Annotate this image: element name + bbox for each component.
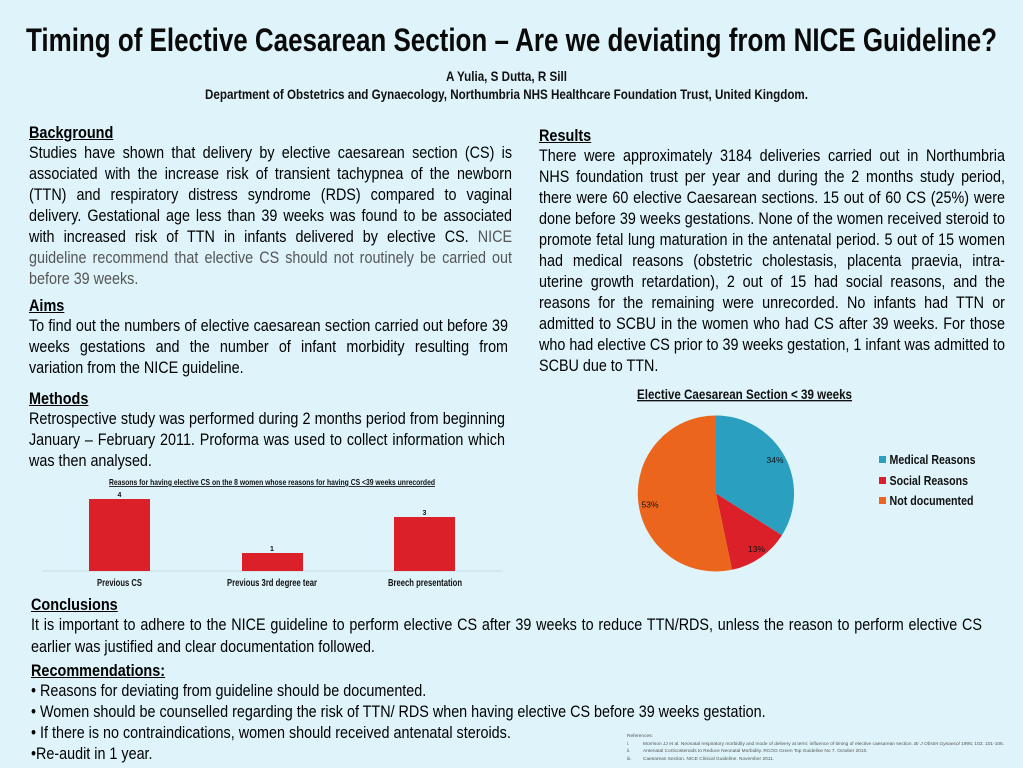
panel: results: There were approximately 3184 deliveries carried out in Northumbria <box>539 147 1005 165</box>
authors and affiliation <box>205 68 808 102</box>
pie chart: elective caesarean section under 39 weeks: 53% <box>641 500 659 510</box>
panel: background: Background <box>29 123 113 142</box>
panel: recommendations: • Women should be counselled regarding the risk of TTN/ RDS when having elective CS before 39 weeks gestation. <box>31 703 766 721</box>
bar chart: reasons unrecorded: Previous 3rd degree tear <box>227 578 317 589</box>
pie chart: elective caesarean section under 39 weeks: 13% <box>748 544 765 554</box>
authors and affiliation: A Yulia, S Dutta, R Sill <box>446 68 567 84</box>
references: References: <box>627 734 653 739</box>
references: Caesarean Section. NICE Clinical Guideline. November 2011. <box>643 756 774 762</box>
panel: results: reasons for the remaining were unrecorded. No infants had TTN or <box>539 294 1005 312</box>
references: Antenatal Corticosteroids to Reduce Neonatal Morbidity. RCOG Green Top Guideline No 7. October 2010. <box>643 749 868 754</box>
panel: results: who had elective CS prior to 39 weeks gestation, 1 infant was admitted to <box>539 336 1005 354</box>
bar chart: reasons unrecorded: 1 <box>270 546 274 553</box>
bar chart: reasons unrecorded <box>42 477 503 589</box>
panel: recommendations <box>31 661 766 763</box>
panel: conclusions: Conclusions <box>31 595 118 614</box>
panel: methods: was then analysed. <box>29 452 152 470</box>
bar chart: reasons unrecorded: Breech presentation <box>388 578 462 589</box>
panel: conclusions: It is important to adhere to the NICE guideline to perform elective CS after 39 weeks to reduce TTN/RDS, unless the reason to perform elective CS <box>31 616 982 634</box>
panel: results: there were 60 elective Caesarean sections. 15 out of 60 CS (25%) were <box>539 189 1005 207</box>
panel: methods: Retrospective study was performed during 2 months period from beginning <box>29 410 505 428</box>
panel: results: done before 39 weeks gestations. None of the women received steroid to <box>539 210 1005 228</box>
references <box>627 734 1004 762</box>
panel: background: Studies have shown that delivery by elective caesarean section (CS) is <box>29 144 512 162</box>
panel: results <box>539 126 1005 375</box>
references: Morrison JJ et al. Neonatal respiratory morbidity and mode of delivery at term: influence of timing of elective caesarean section. Br J Obstet Gynaecol 1995; 102: 101-106. <box>643 742 1004 746</box>
panel: results: NHS foundation trust per year and during the 2 months study period, <box>539 168 1005 186</box>
panel: results: promote fetal lung maturation in the antenatal period. 5 out of 15 women <box>539 231 1005 249</box>
panel: conclusions <box>31 595 982 656</box>
references: i. <box>627 742 629 746</box>
panel: results: uterine growth retardation), 2 out of 15 had social reasons, and the <box>539 273 1005 291</box>
panel: recommendations: • If there is no contraindications, women should received antenatal steroids. <box>31 724 511 742</box>
panel: background <box>29 123 512 288</box>
panel: background: guideline recommend that elective CS should not routinely be carried out <box>29 249 512 267</box>
panel: background: with increased risk of TTN in infants delivered by elective CS. NICE <box>29 228 512 246</box>
panel: recommendations: Recommendations: <box>31 661 165 680</box>
panel: results: admitted to SCBU in the women who had CS after 39 weeks. For those <box>539 315 1005 333</box>
panel: results: had medical reasons (obstetric cholestasis, placenta praevia, intra- <box>539 252 1005 270</box>
panel: methods: January – February 2011. Proforma was used to collect information which <box>29 431 505 449</box>
pie chart: elective caesarean section under 39 weeks: Social Reasons <box>890 474 968 488</box>
panel: background: before 39 weeks. <box>29 270 138 288</box>
panel: aims <box>29 296 508 377</box>
bar chart: reasons unrecorded: 4 <box>118 492 122 499</box>
panel: aims: To find out the numbers of elective caesarean section carried out before 39 <box>29 317 508 335</box>
panel: methods <box>29 389 505 470</box>
panel: background: associated with the increase risk of transient tachypnea of the newborn <box>29 165 512 183</box>
panel: aims: Aims <box>29 296 64 315</box>
panel: methods: Methods <box>29 389 88 408</box>
bar chart: reasons unrecorded: Previous CS <box>97 578 142 589</box>
references: iii. <box>627 756 632 762</box>
panel: conclusions: earlier was justified and clear documentation followed. <box>31 638 375 656</box>
panel: results: SCBU due to TTN. <box>539 357 658 375</box>
pie chart: elective caesarean section under 39 weeks <box>637 387 976 572</box>
references: ii. <box>627 749 630 754</box>
panel: recommendations: • Reasons for deviating from guideline should be documented. <box>31 682 426 700</box>
panel: background: (TTN) and respiratory distress syndrome (RDS) compared to vaginal <box>29 186 512 204</box>
panel: aims: weeks gestations and the number of infant morbidity resulting from <box>29 338 508 356</box>
panel: recommendations: •Re-audit in 1 year. <box>31 745 153 763</box>
panel: results: Results <box>539 126 591 145</box>
pie chart: elective caesarean section under 39 weeks: 34% <box>766 455 784 465</box>
panel: aims: variation from the NICE guideline. <box>29 359 244 377</box>
pie chart: elective caesarean section under 39 weeks: Elective Caesarean Section < 39 weeks <box>637 387 852 402</box>
bar chart: reasons unrecorded: 3 <box>423 510 427 517</box>
panel: background: delivery. Gestational age less than 39 weeks was found to be associated <box>29 207 512 225</box>
